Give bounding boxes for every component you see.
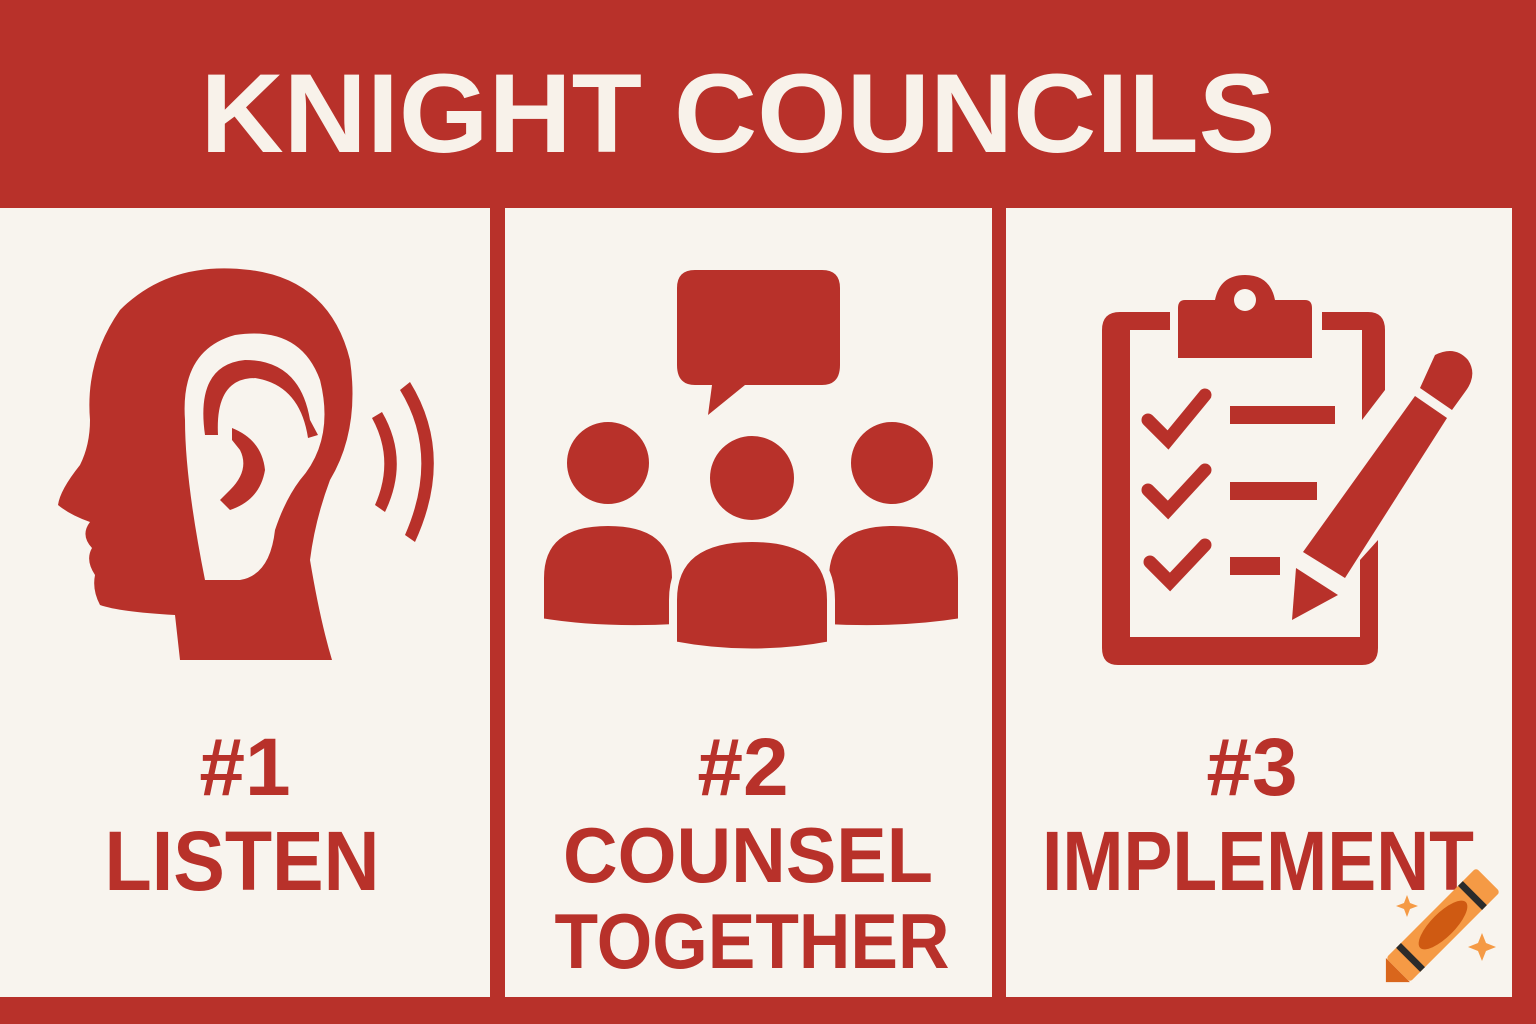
panel: implement — [1006, 208, 1512, 997]
icon: clipboard — [1102, 275, 1385, 665]
icon: sparkles — [1396, 895, 1496, 961]
heading: #2 COUNSEL TOGETHER — [554, 722, 950, 985]
icon: group of people — [540, 418, 962, 652]
icon: head with ear — [58, 268, 434, 660]
heading: #2 COUNSEL TOGETHER: TOGETHER — [554, 897, 950, 985]
heading: #2 COUNSEL TOGETHER: #2 — [697, 722, 789, 813]
heading: #1 LISTEN — [104, 722, 380, 908]
icon: speech bubble — [677, 270, 840, 415]
heading: #3 IMPLEMENT: #3 — [1206, 722, 1298, 813]
heading: #1 LISTEN: #1 — [199, 722, 291, 813]
icon: pencil — [1292, 351, 1472, 620]
heading: #3 IMPLEMENT — [1042, 722, 1474, 908]
heading: #3 IMPLEMENT: IMPLEMENT — [1042, 814, 1474, 908]
panel: listen — [0, 208, 490, 997]
heading: #1 LISTEN: LISTEN — [104, 814, 380, 908]
icon: crayon — [1374, 868, 1500, 994]
title: KNIGHT COUNCILS — [200, 51, 1276, 176]
panel: counsel together — [505, 208, 992, 997]
heading: #2 COUNSEL TOGETHER: COUNSEL — [563, 811, 933, 899]
